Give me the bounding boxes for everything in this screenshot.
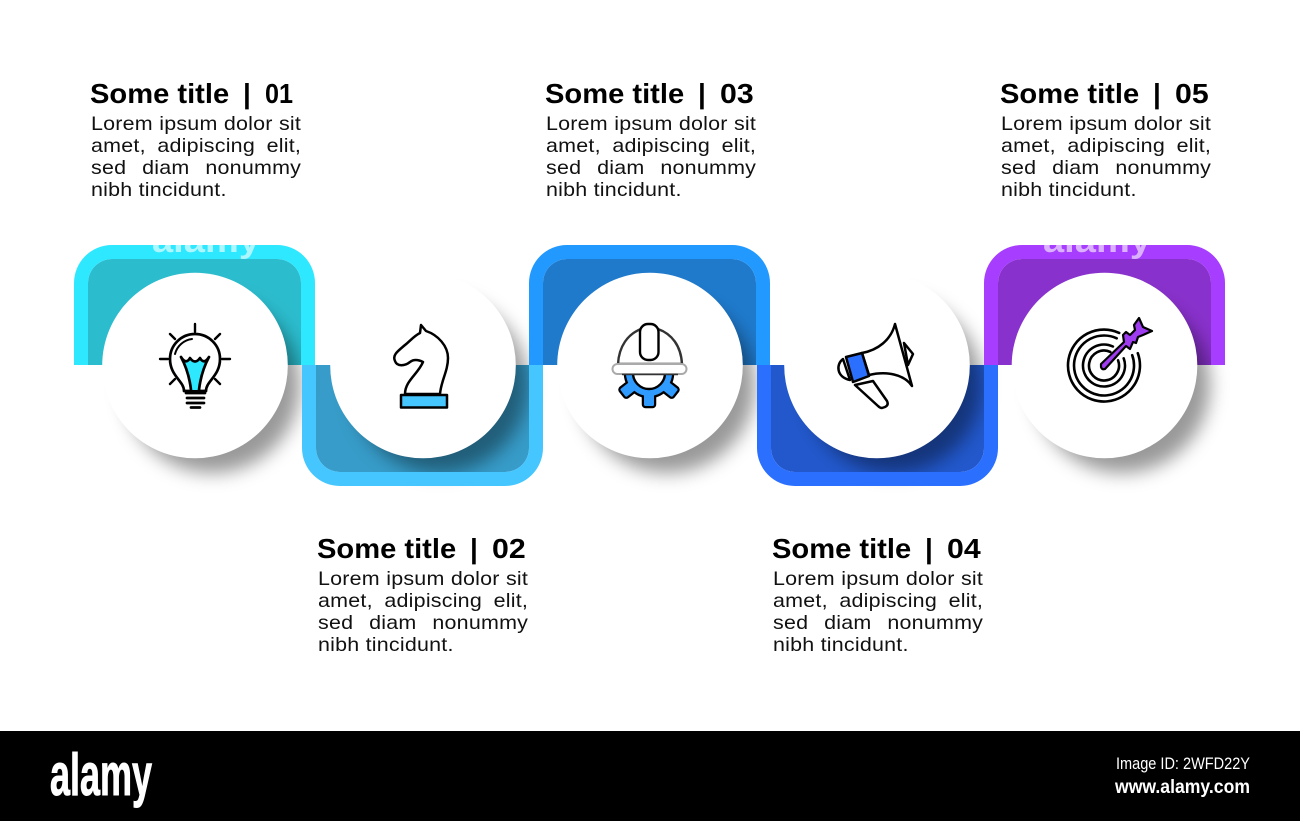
text block 01: |: [243, 78, 251, 109]
text block 02: Lorem ipsum dolor sit: [318, 568, 528, 590]
text block 03: amet, adipiscing elit,: [546, 134, 756, 156]
icon: chess knight: [394, 325, 448, 408]
text block 05: sed diam nonummy: [1001, 156, 1211, 178]
text block 01: amet, adipiscing elit,: [91, 134, 301, 156]
text block 04: [772, 533, 983, 656]
text block 02: nibh tincidunt.: [318, 634, 454, 656]
panel 4 band: [757, 365, 998, 486]
watermark fragment on panel 1: alamy: [152, 222, 260, 260]
text block 03: Some title: [545, 78, 684, 109]
watermark fragment on panel 5: alamy: [1043, 222, 1151, 260]
text block 03: Lorem ipsum dolor sit: [546, 112, 756, 134]
text block 04: nibh tincidunt.: [773, 634, 909, 656]
text block 04: sed diam nonummy: [773, 612, 983, 634]
white circles: [102, 273, 1197, 458]
text block 04: Some title: [772, 533, 911, 564]
circle drop shadows: [124, 297, 1210, 473]
panel 1 band: [74, 245, 315, 365]
footer logo: alamy: [50, 742, 152, 808]
text block 01: Some title: [90, 78, 229, 109]
footer bar: [0, 731, 1300, 821]
icon: target with dart: [1068, 318, 1152, 402]
text block 05: amet, adipiscing elit,: [1001, 134, 1211, 156]
text block 03: |: [698, 78, 706, 109]
panel 3 band: [529, 245, 770, 365]
text block 03: 03: [720, 78, 754, 109]
text block 04: amet, adipiscing elit,: [773, 590, 983, 612]
text block 01: [90, 78, 301, 200]
icon: light bulb: [160, 324, 230, 408]
text block 01: 01: [265, 78, 293, 109]
text block 03: nibh tincidunt.: [546, 178, 682, 200]
text block 02: sed diam nonummy: [318, 612, 528, 634]
footer image id: Image ID: 2WFD22Y: [1116, 754, 1250, 773]
text block 04: |: [925, 533, 933, 564]
text block 05: 05: [1175, 78, 1209, 109]
text block 04: 04: [947, 533, 981, 564]
text block 05: [1000, 78, 1211, 200]
panel 2 band: [302, 365, 543, 486]
inner fills of the panels: [88, 259, 1211, 472]
text block 01: Lorem ipsum dolor sit: [91, 112, 301, 134]
icon: helmet and gear: [612, 324, 686, 406]
text block 02: Some title: [317, 533, 456, 564]
panel 5 band: [984, 245, 1225, 365]
footer url: www.alamy.com: [1114, 777, 1250, 798]
text block 01: sed diam nonummy: [91, 156, 301, 178]
text block 02: [317, 533, 528, 656]
text block 01: nibh tincidunt.: [91, 178, 227, 200]
text block 05: Some title: [1000, 78, 1139, 109]
text block 05: Lorem ipsum dolor sit: [1001, 112, 1211, 134]
icon: megaphone: [838, 324, 913, 408]
text block 02: amet, adipiscing elit,: [318, 590, 528, 612]
text block 03: [545, 78, 756, 200]
text block 02: 02: [492, 533, 526, 564]
text block 05: |: [1153, 78, 1161, 109]
text block 05: nibh tincidunt.: [1001, 178, 1137, 200]
text block 04: Lorem ipsum dolor sit: [773, 568, 983, 590]
text block 02: |: [470, 533, 478, 564]
text block 03: sed diam nonummy: [546, 156, 756, 178]
